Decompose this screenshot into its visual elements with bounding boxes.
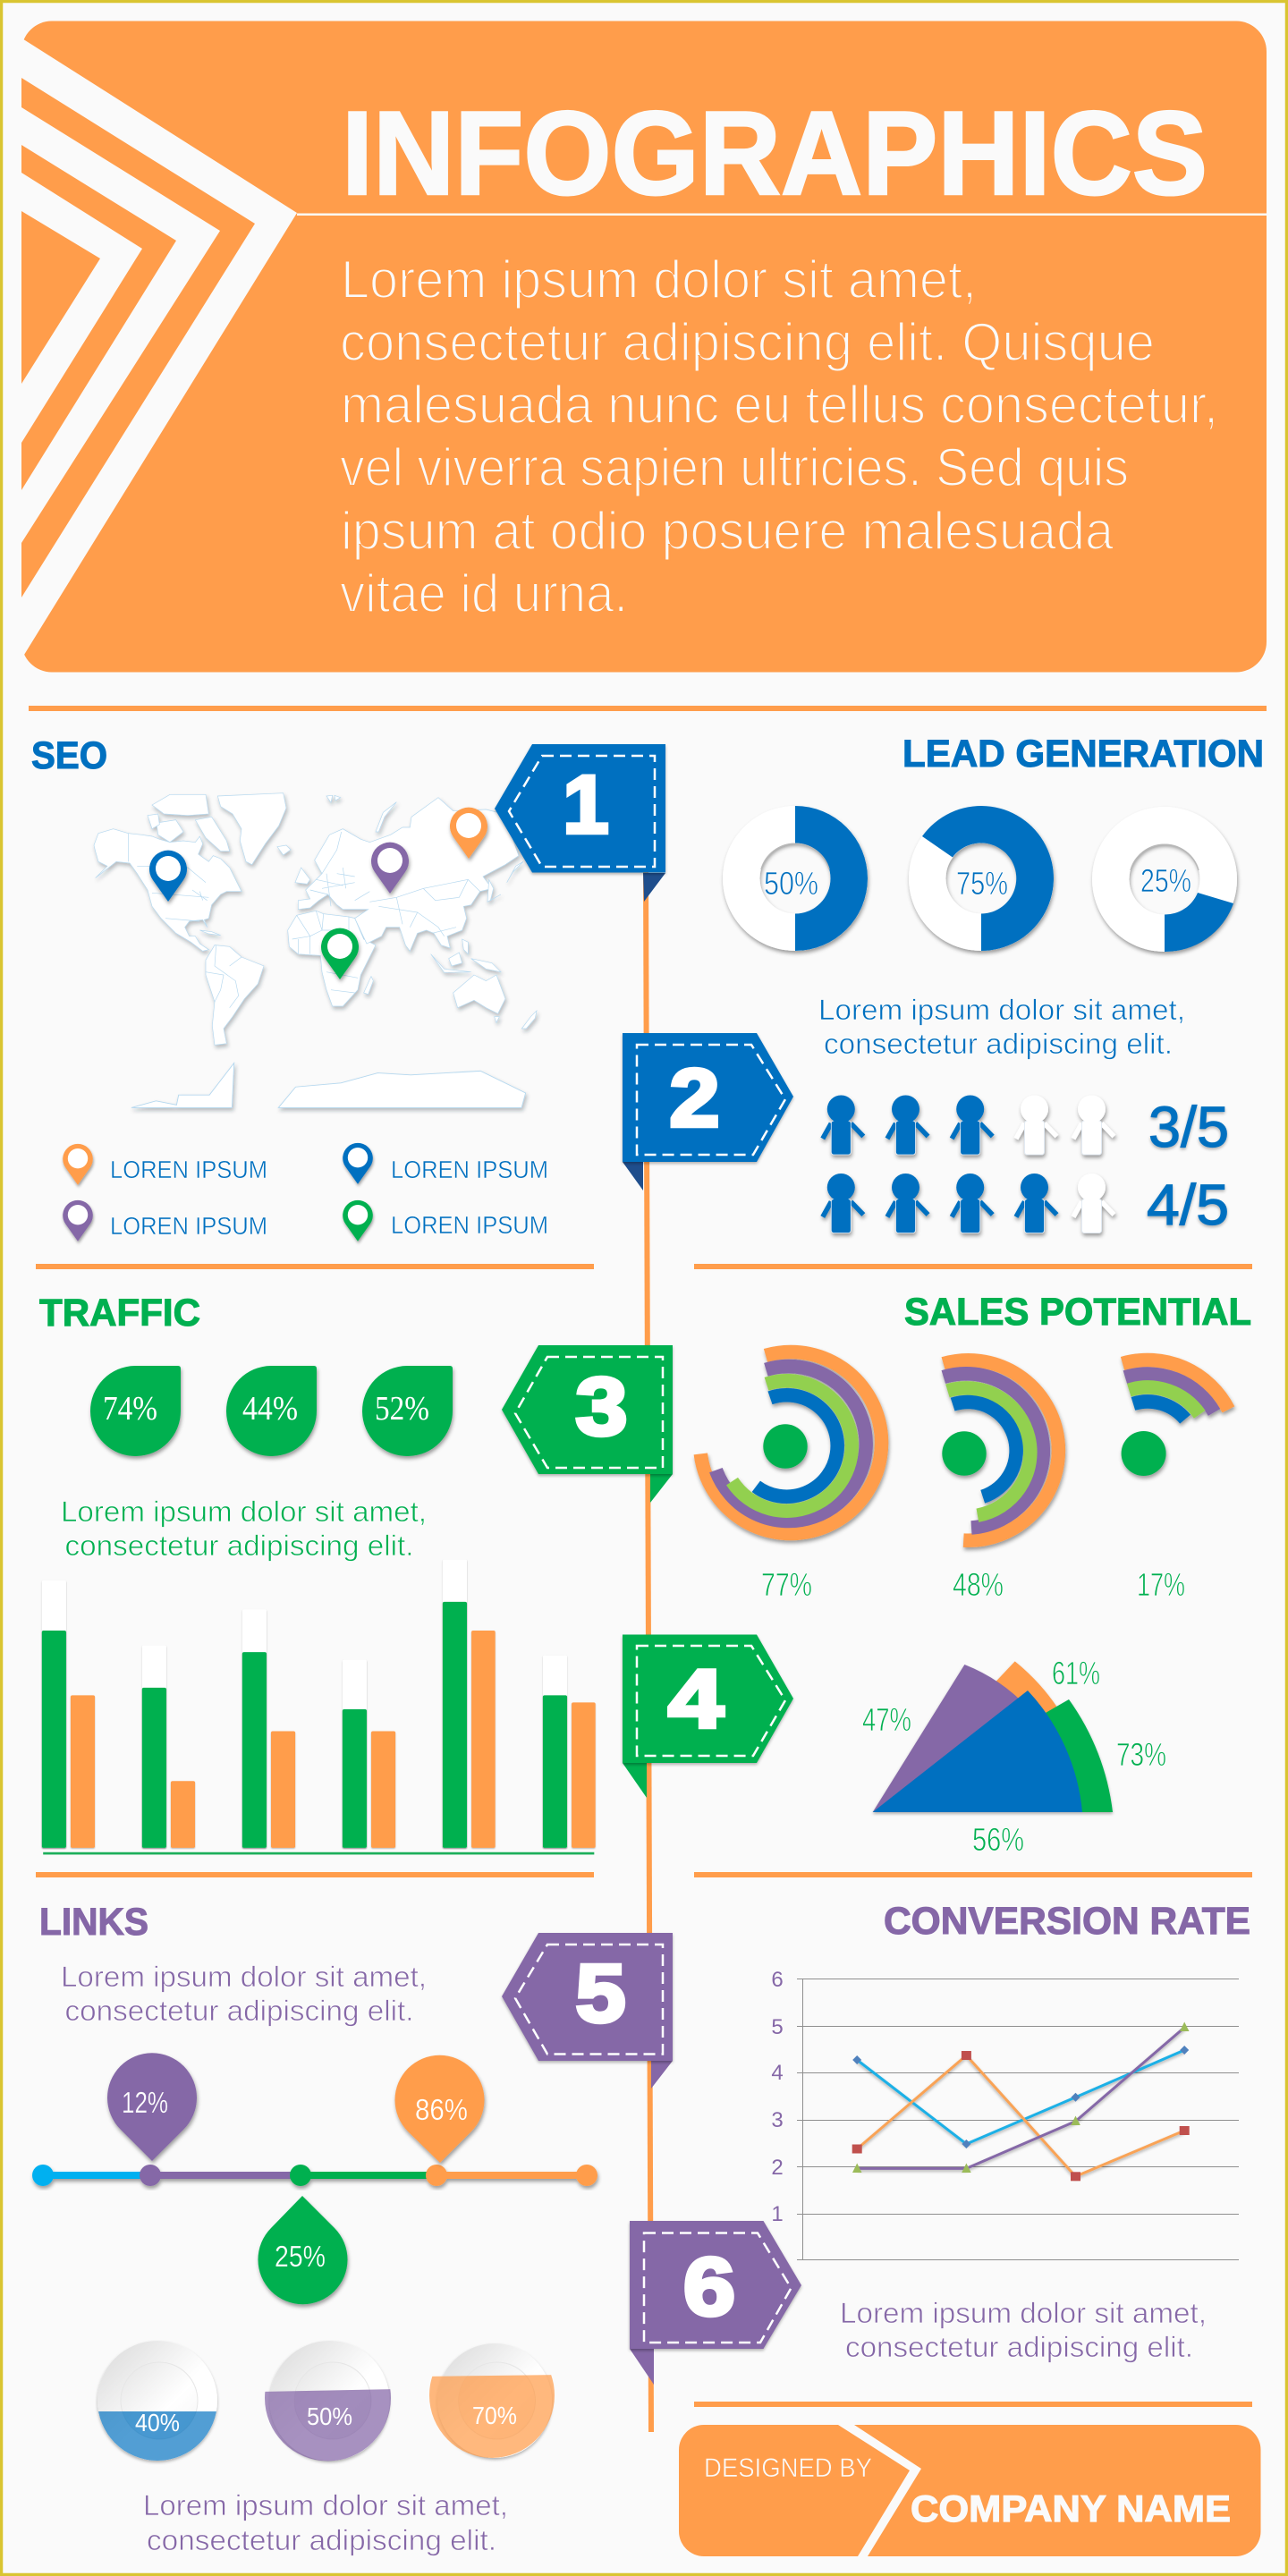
gauge: 70% [429,2333,555,2458]
text block: conversion rate: Lorem ipsum dolor sit amet, [840,2297,1207,2329]
labels: fan chart [862,1655,1166,1858]
labels: fan chart: 73% [1116,1736,1166,1773]
labels: radial charts: 77% [761,1566,812,1603]
tag 3: 3 [576,1361,628,1453]
text block: intro: consectetur adipiscing elit. Quisque [340,312,1155,372]
text block: intro: ipsum at odio posuere malesuada [341,501,1114,561]
map pin: blue [149,851,187,902]
marker: 86%: 86% [415,2093,468,2126]
panel: sales potential [700,1291,1251,1858]
text block: lead generation: Lorem ipsum dolor sit amet, [818,994,1185,1026]
marker: 25%: 25% [275,2240,326,2273]
map pin: green [321,928,359,979]
designed by: DESIGNED BY [704,2453,872,2483]
text block: lead generation: consectetur adipiscing elit. [824,1028,1173,1060]
ratio: 3/5: 3/5 [1148,1095,1229,1159]
heading: SEO: SEO [31,734,107,777]
text block: traffic [61,1496,427,1562]
labels: fan chart: 56% [972,1821,1024,1858]
tag 1: 1 [563,759,609,851]
badge: 44% [226,1366,317,1456]
text block: conversion rate: consectetur adipiscing elit. [845,2331,1193,2363]
gauge: 40% [97,2341,217,2461]
text block: intro: vel viverra sapien ultricies. Sed quis [340,437,1129,497]
badge: 74% [90,1366,181,1456]
ratio: 4/5: 4/5 [1147,1173,1229,1237]
gauge: 50%: 50% [307,2402,352,2430]
gauge: 40%: 40% [135,2409,180,2436]
tag 2 [623,1033,793,1191]
legend: LOREN IPSUM [110,1212,267,1240]
header divider [297,213,1267,216]
badge: 74%: 74% [103,1390,157,1428]
tag 2: 2 [669,1053,719,1144]
tag 4 [623,1635,793,1798]
donut: 75% [909,806,1054,951]
labels: fan chart: 61% [1052,1655,1100,1691]
text block: intro [340,250,1218,623]
legend: LOREN IPSUM [391,1156,548,1183]
dividers [29,706,1267,2407]
heading: links: LINKS [39,1901,148,1944]
labels: fan chart: 47% [862,1701,911,1738]
line chart: 6 [771,1968,784,1992]
line chart: 5 [771,2015,784,2039]
tag 4: 4 [668,1654,724,1745]
donut: 50%: 50% [764,865,818,902]
radial chart: 77% [700,1352,882,1533]
panel: links [32,1901,597,2556]
map pin: purple [371,843,409,894]
legend: LOREN IPSUM [110,1156,267,1183]
heading: lead generation: LEAD GENERATION [902,733,1264,775]
donut: 50% [723,806,868,951]
pictogram: 3 of 5 [823,1095,1114,1155]
map pin: orange [450,808,487,859]
text block: intro: malesuada nunc eu tellus consectetur, [341,375,1218,435]
text block: links [61,1961,427,2027]
line chart: 1 [771,2202,784,2226]
icon: chevron stripes [18,36,297,655]
tag 3 [502,1345,673,1503]
heading: conversion rate: CONVERSION RATE [884,1900,1250,1943]
tag 6: 6 [683,2241,735,2333]
text block: conversion rate [840,2297,1207,2363]
icon: footer chevron [838,2425,921,2556]
tag 5 [502,1933,673,2089]
legend: LOREN IPSUM [391,1211,548,1239]
world map [94,793,537,1107]
bar chart [42,1560,596,1854]
timeline spine [643,872,654,2432]
badge: 44%: 44% [242,1390,298,1428]
tag 1 [495,744,665,902]
radial chart: 17% [1122,1360,1228,1476]
panel: header banner [18,21,1267,673]
badge: 52% [362,1366,453,1456]
tag 5: 5 [576,1948,626,2039]
tag 6 [630,2221,801,2385]
labels: radial charts: 48% [953,1566,1004,1603]
gauge: 50% [265,2334,391,2462]
line chart [771,1968,1239,2260]
panel: traffic [39,1292,596,1854]
text block: links: consectetur adipiscing elit. [64,1995,413,2027]
text block: gauges: consectetur adipiscing elit. [147,2524,496,2556]
title: INFOGRAPHICS [342,88,1208,220]
map country lines [128,832,480,1008]
marker: 12% [107,2053,197,2161]
text block: lead generation [818,994,1185,1060]
heading: sales potential: SALES POTENTIAL [904,1291,1251,1334]
text block: traffic: consectetur adipiscing elit. [64,1530,413,1562]
radial chart: 48% [942,1360,1058,1540]
marker: 12%: 12% [122,2086,168,2119]
panel: lead generation [723,733,1264,1237]
panel: footer [679,2425,1261,2556]
pictogram: 4 of 5 [823,1174,1114,1233]
text block: intro: vitae id urna. [340,564,628,623]
text block: traffic: Lorem ipsum dolor sit amet, [61,1496,427,1528]
badge: 52%: 52% [375,1390,429,1428]
labels: radial charts [761,1566,1185,1603]
line chart: 3 [771,2108,784,2132]
text block: intro: Lorem ipsum dolor sit amet, [341,250,977,309]
line chart: 2 [771,2156,784,2180]
text block: links: Lorem ipsum dolor sit amet, [61,1961,427,1993]
legend [63,1143,548,1241]
company name: COMPANY NAME [911,2487,1231,2529]
marker: 86% [395,2055,485,2163]
gauge: 70%: 70% [472,2402,517,2429]
line chart: 4 [771,2061,784,2085]
labels: radial charts: 17% [1137,1566,1185,1603]
fan chart [873,1661,1113,1812]
text block: gauges [143,2489,508,2556]
donut: 25%: 25% [1140,862,1191,899]
panel: conversion rate [771,1900,1250,2363]
text block: gauges: Lorem ipsum dolor sit amet, [143,2489,508,2521]
donut: 75%: 75% [956,865,1008,902]
timeline [32,2165,597,2186]
heading: traffic: TRAFFIC [39,1292,200,1335]
panel: SEO [31,734,548,1241]
marker: 25% [258,2196,347,2304]
donut: 25% [1092,807,1237,952]
